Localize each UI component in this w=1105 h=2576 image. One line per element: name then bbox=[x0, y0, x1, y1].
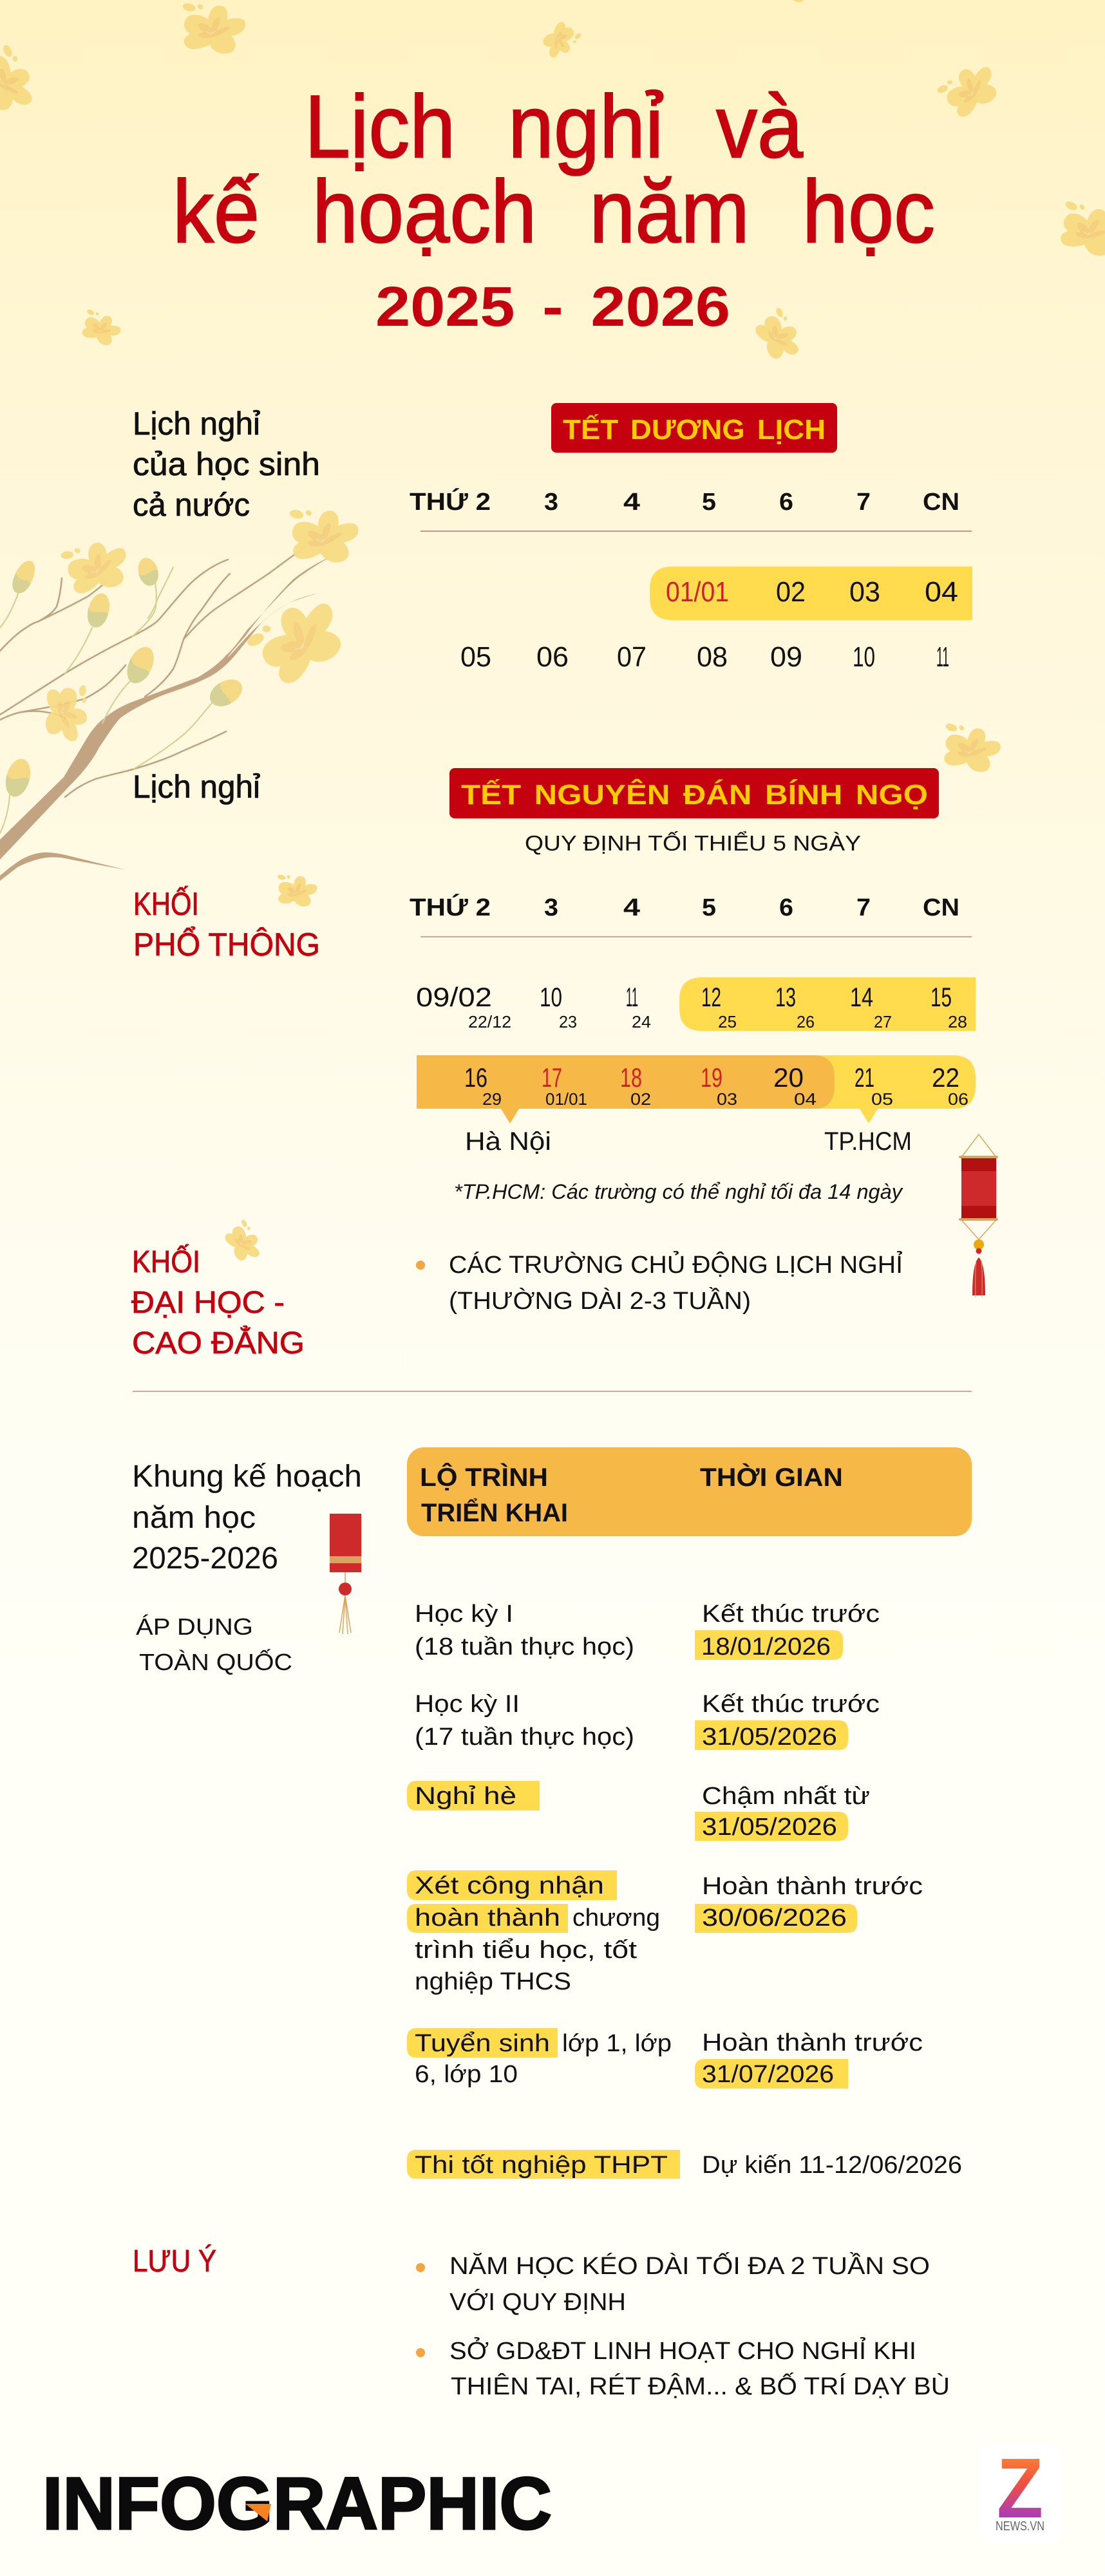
calendar 1: weekday header: CN bbox=[923, 489, 959, 516]
icon: hanging scroll bbox=[959, 1134, 998, 1297]
calendar 1: dates: 04 bbox=[925, 576, 958, 608]
calendar 2: week two dates: 05 bbox=[871, 1089, 893, 1109]
calendar 2: weekday header: THỨ 2 bbox=[410, 893, 491, 921]
row: summer break: Nghỉ hè bbox=[415, 1783, 516, 1810]
calendar 2: week two dates: 19 bbox=[701, 1062, 722, 1093]
section label: student holidays bbox=[133, 406, 320, 523]
calendar 1: weekday header: THỨ 2 bbox=[410, 487, 491, 516]
calendar 2: weekday header: CN bbox=[923, 894, 959, 921]
calendar 1: dates: 06 bbox=[536, 641, 569, 673]
calendar 2: weekday header: 3 bbox=[544, 894, 558, 921]
calendar 1: weekday header: 7 bbox=[856, 489, 871, 516]
row: semester 1: Kết thúc trước bbox=[702, 1601, 880, 1628]
callout: Hà Nội bbox=[465, 1109, 551, 1156]
row: admissions: 6, lớp 10 bbox=[415, 2061, 518, 2088]
calendar 2: week one dates: 12 bbox=[701, 982, 721, 1012]
row: admissions: lớp 1, lớp bbox=[562, 2030, 672, 2057]
calendar 2: week one dates: 15 bbox=[930, 982, 952, 1012]
decorative flowers: header area bbox=[0, 0, 1105, 1266]
calendar 2: week two dates: 16 bbox=[464, 1062, 487, 1093]
badge: Tết Dương lịch bbox=[551, 403, 837, 453]
row: graduation exam: Dự kiến 11-12/06/2026 bbox=[702, 2152, 962, 2179]
row: semester 1: (18 tuần thực học) bbox=[415, 1633, 634, 1660]
row: semester 1: 18/01/2026 bbox=[701, 1633, 831, 1660]
section label: student holidays: của học sinh bbox=[133, 446, 320, 482]
calendar 1: weekday header: 6 bbox=[779, 489, 793, 516]
calendar 2: week one dates: 13 bbox=[775, 982, 796, 1012]
row: admissions: 31/07/2026 bbox=[702, 2061, 834, 2088]
calendar 2: week one dates: 24 bbox=[632, 1012, 651, 1031]
title: kế hoạch năm học bbox=[173, 162, 935, 261]
row: admissions bbox=[407, 2028, 923, 2089]
title bbox=[173, 77, 935, 261]
calendar 1: weekday header: 5 bbox=[702, 489, 716, 516]
label: applied nationwide: ÁP DỤNG bbox=[136, 1613, 253, 1640]
callout: TP.HCM bbox=[824, 1109, 912, 1156]
row: summer break: 31/05/2026 bbox=[702, 1814, 837, 1841]
note list: NĂM HỌC KÉO DÀI TỐI ĐA 2 TUẦN SO bbox=[449, 2251, 930, 2280]
row: completion recognition: 30/06/2026 bbox=[702, 1904, 847, 1932]
note: universities set own schedule bbox=[416, 1250, 903, 1315]
row: completion recognition: Xét công nhận bbox=[415, 1872, 604, 1899]
section label: school year framework bbox=[132, 1460, 362, 1575]
calendar 2: weekday header: 4 bbox=[623, 894, 640, 921]
calendar 2: weekday header bbox=[410, 893, 972, 937]
row: semester 2 bbox=[415, 1691, 880, 1751]
calendar 1: dates: 11 bbox=[936, 641, 949, 673]
row: admissions: Hoàn thành trước bbox=[702, 2029, 923, 2056]
label: university and college: KHỐI bbox=[132, 1244, 200, 1279]
note list: THIÊN TAI, RÉT ĐẬM... & BỐ TRÍ DẠY BÙ bbox=[451, 2371, 950, 2400]
calendar 2: week two dates: 06 bbox=[948, 1089, 968, 1109]
row: semester 2: (17 tuần thực học) bbox=[415, 1724, 634, 1751]
calendar 2: week one dates: 22/12 bbox=[468, 1012, 511, 1031]
calendar 2: week one dates: 25 bbox=[718, 1012, 737, 1031]
calendar 2: week one dates: 10 bbox=[540, 982, 562, 1012]
callout: TP.HCM: TP.HCM bbox=[824, 1127, 912, 1156]
footnote: *TP.HCM: Các trường có thể nghỉ tối đa 14 ngày bbox=[454, 1180, 903, 1203]
calendar 1: highlight bar bbox=[650, 567, 972, 620]
calendar 2: week two dates: 02 bbox=[630, 1089, 651, 1109]
calendar 2: week one dates bbox=[416, 982, 967, 1031]
note list: SỞ GD&ĐT LINH HOẠT CHO NGHỈ KHI bbox=[449, 2336, 916, 2365]
calendar 2: week two dates: 18 bbox=[620, 1062, 642, 1093]
calendar 2: highlight bars bbox=[417, 977, 976, 1109]
label: university and college: CAO ĐẲNG bbox=[132, 1326, 305, 1360]
calendar 1: dates: 02 bbox=[776, 576, 806, 608]
calendar 2: week two dates: 01/01 bbox=[545, 1089, 587, 1109]
title: Lịch nghỉ và bbox=[305, 77, 803, 176]
calendar 2: week two dates: 29 bbox=[482, 1089, 502, 1109]
calendar 2: week one dates: 09/02 bbox=[416, 982, 492, 1012]
calendar 1: dates: 01/01 bbox=[666, 576, 729, 608]
illustration: apricot blossom branch bbox=[0, 505, 358, 881]
label: applied nationwide: TOÀN QUỐC bbox=[139, 1648, 292, 1675]
calendar 1: dates: 03 bbox=[849, 576, 880, 608]
label: general schools: PHỔ THÔNG bbox=[133, 926, 320, 963]
calendar 1: dates: 08 bbox=[697, 641, 728, 673]
label: applied nationwide bbox=[136, 1613, 292, 1675]
table header: THỜI GIAN bbox=[700, 1462, 843, 1492]
calendar 1: weekday header: 4 bbox=[623, 489, 640, 516]
badge: Tết Nguyên đán bbox=[449, 768, 939, 818]
subtitle: school year: 2025 - 2026 bbox=[375, 276, 730, 338]
calendar 2: week two dates: 17 bbox=[542, 1062, 562, 1093]
section label: school year framework: Khung kế hoạch bbox=[132, 1460, 362, 1494]
badge: Tết Dương lịch: TẾT DƯƠNG LỊCH bbox=[563, 413, 826, 446]
row: summer break bbox=[407, 1781, 870, 1841]
label: general schools: KHỐI bbox=[133, 885, 199, 922]
table header bbox=[407, 1447, 972, 1536]
calendar 1: dates: 07 bbox=[617, 641, 647, 673]
logo: Z News bbox=[978, 2441, 1062, 2544]
calendar 1: dates: 09 bbox=[770, 641, 802, 673]
icon: small hanging charm bbox=[330, 1514, 361, 1634]
calendar 2: week one dates: 26 bbox=[797, 1012, 815, 1031]
label: notes: LƯU Ý bbox=[133, 2244, 216, 2279]
calendar 1: dates: 05 bbox=[460, 641, 491, 673]
calendar 1: weekday header: 3 bbox=[544, 489, 558, 516]
section label: school year framework: 2025-2026 bbox=[132, 1541, 278, 1575]
calendar 2: week one dates: 27 bbox=[874, 1012, 892, 1031]
section label: student holidays: Lịch nghỉ bbox=[133, 406, 260, 442]
calendar 2: week two dates: 04 bbox=[794, 1089, 817, 1109]
section label: holiday: Lịch nghỉ bbox=[133, 769, 260, 805]
row: graduation exam: Thi tốt nghiệp THPT bbox=[415, 2152, 668, 2179]
section label: student holidays: cả nước bbox=[133, 487, 250, 523]
note: universities set own schedule: (THƯỜNG DÀI 2-3 TUẦN) bbox=[449, 1286, 751, 1315]
row: completion recognition: trình tiểu học, tốt bbox=[415, 1937, 638, 1964]
calendar 2: week two dates: 03 bbox=[717, 1089, 737, 1109]
logo: Z News: Z bbox=[997, 2441, 1043, 2535]
row: completion recognition: Hoàn thành trước bbox=[702, 1873, 923, 1900]
row: completion recognition: nghiệp THCS bbox=[415, 1968, 571, 1995]
calendar 1: dates bbox=[460, 576, 958, 673]
calendar 2: week one dates: 11 bbox=[626, 982, 638, 1012]
calendar 2: weekday header: 6 bbox=[779, 894, 793, 921]
calendar 2: weekday header: 7 bbox=[856, 894, 871, 921]
row: semester 2: Học kỳ II bbox=[415, 1691, 520, 1718]
badge: Tết Nguyên đán: TẾT NGUYÊN ĐÁN BÍNH NGỌ bbox=[461, 778, 928, 811]
row: completion recognition: hoàn thành bbox=[415, 1904, 560, 1932]
calendar 2: week two dates: 22 bbox=[932, 1062, 959, 1093]
note list: VỚI QUY ĐỊNH bbox=[449, 2288, 626, 2316]
callout: Hà Nội: Hà Nội bbox=[465, 1127, 551, 1156]
logo: Z News: NEWS.VN bbox=[996, 2519, 1044, 2534]
label: university and college: ĐẠI HỌC - bbox=[131, 1286, 285, 1320]
row: admissions: Tuyển sinh bbox=[415, 2030, 550, 2057]
row: semester 1 bbox=[415, 1601, 880, 1660]
calendar 1: weekday header bbox=[410, 487, 972, 532]
row: semester 2: Kết thúc trước bbox=[702, 1691, 880, 1718]
note list bbox=[416, 2251, 950, 2400]
calendar 2: week one dates: 23 bbox=[559, 1012, 577, 1031]
note: universities set own schedule: CÁC TRƯỜNG CHỦ ĐỘNG LỊCH NGHỈ bbox=[449, 1250, 903, 1279]
row: completion recognition: chương bbox=[572, 1904, 660, 1932]
table header: LỘ TRÌNH bbox=[420, 1462, 548, 1492]
label: university and college bbox=[131, 1244, 305, 1360]
calendar 2: week two dates bbox=[464, 1062, 968, 1109]
row: completion recognition bbox=[407, 1870, 923, 1995]
calendar 2: week one dates: 28 bbox=[948, 1012, 967, 1031]
row: semester 2: 31/05/2026 bbox=[702, 1724, 837, 1751]
calendar 2: weekday header: 5 bbox=[702, 894, 716, 921]
label: general schools bbox=[133, 885, 320, 963]
calendar 1: dates: 10 bbox=[853, 641, 875, 673]
calendar 2: week two dates: 21 bbox=[855, 1062, 874, 1093]
row: semester 1: Học kỳ I bbox=[415, 1601, 513, 1628]
row: graduation exam bbox=[407, 2150, 962, 2179]
calendar 2: week one dates: 14 bbox=[850, 982, 873, 1012]
section label: school year framework: năm học bbox=[132, 1501, 256, 1535]
table header: TRIỂN KHAI bbox=[421, 1497, 568, 1527]
footer wordmark: INFOGRAPHIC: INFOGRAPHIC bbox=[42, 2463, 552, 2545]
subheading: minimum 5 days: QUY ĐỊNH TỐI THIỂU 5 NGÀY bbox=[525, 831, 861, 855]
row: summer break: Chậm nhất từ bbox=[702, 1783, 870, 1810]
calendar 2: week two dates: 20 bbox=[773, 1062, 804, 1093]
